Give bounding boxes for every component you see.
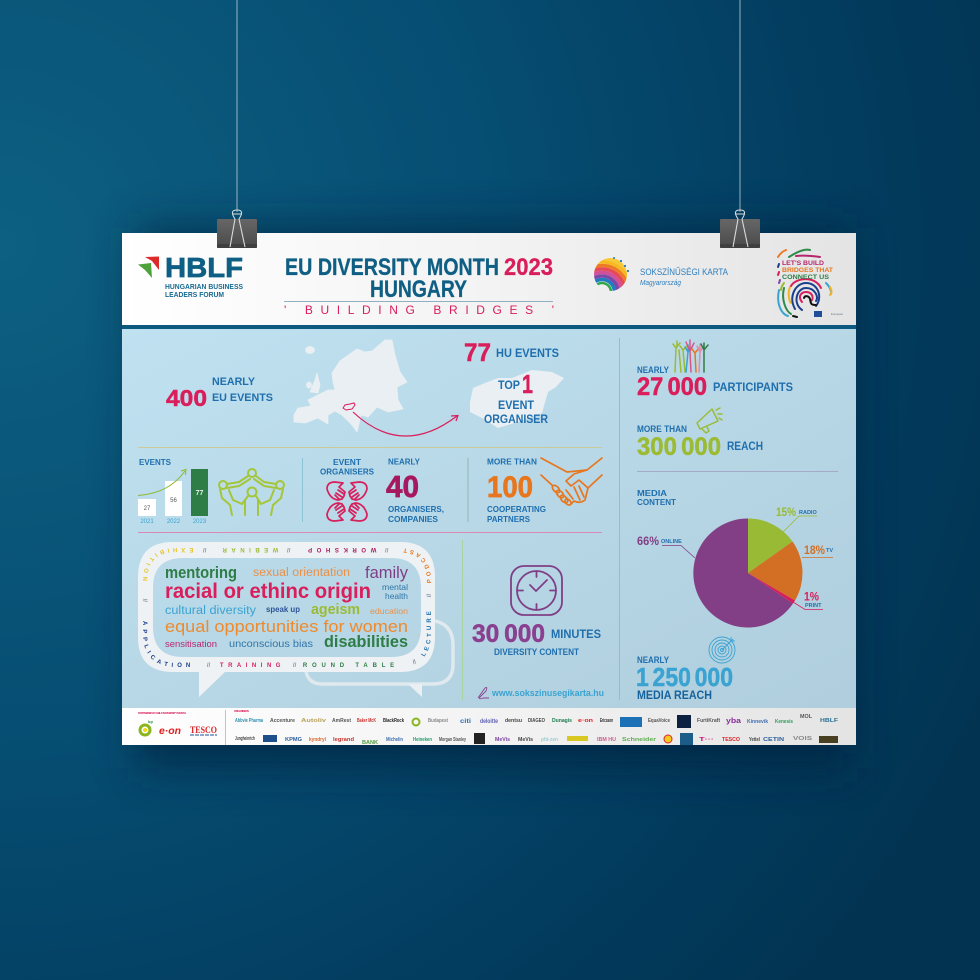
organiser logos: Ericsson <box>600 718 613 724</box>
organiser logos: Autoliv <box>301 718 326 724</box>
word cloud: sexual orientation <box>253 567 350 579</box>
EU flag <box>814 311 822 317</box>
stat: top 1 event organiser <box>484 369 549 426</box>
second bubble outline <box>306 621 453 697</box>
icon: clock <box>511 566 562 615</box>
icon: handshake <box>541 458 602 506</box>
word cloud: unconscious bias <box>229 638 313 650</box>
footer sponsors <box>138 709 838 746</box>
chart label: EVENTS <box>139 457 171 467</box>
organiser logos: CETIN <box>763 737 785 743</box>
icon: four hands <box>327 482 367 521</box>
organiser logos: FurtiKraft <box>697 718 720 724</box>
footer band <box>122 708 856 745</box>
icon: raised hands <box>673 340 708 372</box>
ring label text: // <box>143 598 148 602</box>
organiser logos: HBLF <box>820 718 838 724</box>
media content heading: MEDIA <box>637 488 667 498</box>
subtitle: ' BUILDING BRIDGES ' <box>284 303 554 317</box>
organiser logos: e·on <box>578 718 593 724</box>
ring label text: LECTURE <box>421 612 431 656</box>
ring label text: APPLICATION <box>143 621 190 667</box>
word cloud speech bubble <box>138 542 455 697</box>
organiser logos: Baker McK <box>357 718 376 724</box>
organiser logos: legrand <box>333 737 354 743</box>
text: event organisers heading: ORGANISERS <box>320 466 374 476</box>
campaign slogan: LET'S BUILD <box>782 260 824 267</box>
organiser logos: Budapest <box>428 718 448 724</box>
stat: 77 HU events: 77 <box>464 339 491 367</box>
stat: 27 000 participants: PARTICIPANTS <box>713 382 793 394</box>
icon: megaphone <box>697 408 722 433</box>
stat: 400 EU events <box>166 376 273 411</box>
hanging string right <box>739 0 741 212</box>
organiser logos: phi-zen <box>541 737 558 743</box>
binder clip left <box>217 210 257 248</box>
sponsor: bp: bp <box>148 719 153 724</box>
logo subtitle: LEADERS FORUM <box>165 290 224 299</box>
stat: 77 HU events: HU EVENTS <box>496 348 559 360</box>
label: radio: 15% <box>776 505 796 519</box>
organiser logos: MOL <box>800 714 812 720</box>
word cloud <box>165 563 408 651</box>
stat: more than 100 partners: 100 <box>487 471 533 504</box>
bar 2023: 77 <box>196 490 203 497</box>
slice: TV 18% <box>748 542 802 600</box>
header rule <box>122 325 856 329</box>
stat: 1 250 000 media reach: NEARLY <box>637 655 669 665</box>
organiser logos: Kinnevik <box>747 719 768 725</box>
stat: 300 000 reach: 300 000 <box>637 433 721 461</box>
title rule <box>284 300 553 302</box>
organiser logos: BANK <box>362 740 378 746</box>
word cloud: education <box>370 606 408 616</box>
organiser logos: T··· <box>699 737 715 743</box>
stat: more than 100 partners: PARTNERS <box>487 514 530 524</box>
organiser logos: Accenture <box>270 718 295 724</box>
stat: 1 250 000 media reach <box>636 655 733 702</box>
logo: Sokszínűségi Karta <box>594 257 728 291</box>
rainbow globe <box>594 257 630 291</box>
organiser logos: Morgan Stanley <box>439 737 466 743</box>
sponsor: bp <box>140 719 153 735</box>
ring label text: // <box>385 548 388 552</box>
organiser logos: Kenesis <box>775 719 793 725</box>
bar 2021: 27 <box>144 506 151 512</box>
organiser logos: Jungheinrich <box>235 736 255 742</box>
label: online: ONLINE <box>661 539 682 545</box>
organiser logos: Schneider <box>622 737 656 743</box>
bar 2022: 56 <box>170 498 177 504</box>
organisation name: SOKSZÍNŰSÉGI KARTA <box>640 267 728 277</box>
label: print <box>793 590 823 610</box>
slice: print 1% <box>748 573 795 604</box>
poster shadow <box>135 228 850 768</box>
logo: HBLF <box>138 252 243 299</box>
stat: 27 000 participants: NEARLY <box>637 365 669 375</box>
organiser logos: IBM HU <box>597 737 616 743</box>
organiser logos: TESCO <box>722 737 740 743</box>
sponsor: Tesco: TESCO <box>190 725 217 735</box>
title <box>285 254 553 303</box>
organisation name: Magyarország <box>640 280 681 287</box>
organiser logos: Heineken <box>413 737 432 743</box>
stat: 1 250 000 media reach: MEDIA REACH <box>637 690 712 702</box>
icon: target <box>709 637 735 663</box>
sponsor: e-on: e·on <box>159 726 181 737</box>
label: TV: 18% <box>804 543 825 557</box>
stat: more than 100 partners: MORE THAN <box>487 456 537 466</box>
word cloud: family <box>365 563 408 582</box>
stat: more than 100 partners: COOPERATING <box>487 504 546 514</box>
word cloud: speak up <box>266 604 300 614</box>
organiser logos: AmRest <box>332 718 351 724</box>
stat: top 1 event organiser: EVENT <box>498 400 534 412</box>
stat: 400 EU events: 400 <box>166 385 207 411</box>
map: Hungary <box>470 370 564 428</box>
word cloud: disabilities <box>324 632 408 651</box>
organiser logos: VOIS <box>793 736 813 742</box>
label: print: PRINT <box>805 603 822 609</box>
stat: 77 HU events <box>464 339 559 367</box>
stat: 27 000 participants <box>637 365 793 401</box>
campaign slogan <box>782 260 834 281</box>
pie chart: media content <box>637 505 833 627</box>
organiser logos: KPMG <box>285 737 302 743</box>
header band <box>122 233 856 325</box>
stat: 1 250 000 media reach: 1 250 000 <box>636 662 733 692</box>
logo subtitle: HUNGARIAN BUSINESS <box>165 282 243 291</box>
organiser logos: Yettel <box>749 737 761 743</box>
ring label text: // <box>207 662 210 667</box>
stat: 300 000 reach: REACH <box>727 441 763 453</box>
arrow to Hungary <box>353 412 458 436</box>
ring label text: WORKSHOP <box>308 548 376 552</box>
ring label text: // <box>287 548 290 552</box>
bar chart: events <box>138 457 208 525</box>
stat: nearly 40 organisers: 40 <box>386 469 419 504</box>
organiser logos <box>235 714 838 746</box>
campaign slogan: BRIDGES THAT <box>782 267 834 274</box>
label: print: 1% <box>804 590 819 604</box>
logo mark <box>138 256 159 278</box>
year labels: 2023 <box>193 519 207 525</box>
media content heading: CONTENT <box>637 497 677 507</box>
slice: radio 15% <box>748 518 792 573</box>
label: online: 66% <box>637 534 659 548</box>
stat: 30 000 minutes: 30 000 <box>472 620 545 648</box>
European Commission caption: European <box>831 312 844 316</box>
stat: 400 EU events: EU EVENTS <box>212 392 273 404</box>
stat: 400 EU events: NEARLY <box>212 376 256 388</box>
sponsors caption: PARTNERED BY HBLF IN DIVERSITY MONTH <box>138 711 186 715</box>
icon: pen signature <box>478 687 489 699</box>
footer divider <box>224 710 226 745</box>
stat: top 1 event organiser: ORGANISER <box>484 414 549 426</box>
body panel <box>122 329 856 708</box>
stat: 300 000 reach: MORE THAN <box>637 424 687 434</box>
map: Europe <box>294 340 407 432</box>
website link: www.sokszinusegikarta.hu <box>491 688 604 698</box>
organiser logos: DIAGEO <box>528 718 545 724</box>
label: TV: TV <box>826 548 833 554</box>
organiser logos: Abbvie Pharma <box>235 718 263 724</box>
label: radio <box>776 505 817 532</box>
label: radio: RADIO <box>799 510 817 516</box>
Hungary marker <box>343 403 355 410</box>
word cloud: mental <box>382 582 408 592</box>
logo wordmark: HBLF <box>165 252 243 283</box>
year labels: 2021 <box>140 519 154 525</box>
word cloud: racial or ethinc origin <box>165 580 371 603</box>
binder clip right <box>720 210 760 248</box>
organiser logos: deloitte <box>480 719 499 725</box>
ring label text: // <box>426 594 431 598</box>
ring label text: WEBINAR <box>222 548 278 552</box>
slice: online 66% <box>693 518 793 627</box>
organiser logos: EquaVoice <box>648 718 670 724</box>
organiser logos: MeVis <box>495 737 510 743</box>
organisers caption: ORGANISERS <box>234 709 249 713</box>
campaign logo: fingerprint <box>778 250 844 317</box>
organiser logos: citi <box>460 719 471 725</box>
section rules <box>138 338 838 700</box>
ring label text: PODCAST <box>403 548 432 583</box>
organiser logos: Dunagis <box>552 718 572 724</box>
media content heading <box>637 488 677 507</box>
stat: 30 000 minutes: DIVERSITY CONTENT <box>494 647 580 657</box>
fingerprint rings <box>778 250 832 317</box>
ring label text: TRAINING <box>220 662 280 667</box>
logo subtitle <box>165 282 243 299</box>
ring label text <box>143 548 432 667</box>
word cloud: ageism <box>311 601 360 618</box>
word cloud: equal opportunities for women <box>165 617 408 636</box>
word cloud: sensitisation <box>165 639 217 649</box>
stat: top 1 event organiser: TOP <box>498 380 520 392</box>
stat: 27 000 participants: 27 000 <box>637 373 707 401</box>
stat: more than 100 partners <box>487 456 546 524</box>
stat: top 1 event organiser: 1 <box>522 369 533 399</box>
stat: 300 000 reach <box>637 424 763 461</box>
ring label text: EXHIBITION <box>143 548 193 581</box>
organiser logos: BlackRock <box>383 718 404 724</box>
stat: nearly 40 organisers: ORGANISERS, <box>388 504 444 514</box>
hanging string left <box>236 0 238 212</box>
growth arrow <box>138 470 186 496</box>
stat: 30 000 minutes <box>472 620 601 657</box>
ring label text: ROUND TABLE <box>303 662 394 667</box>
icon: people in a circle <box>219 469 284 515</box>
word cloud: cultural diversity <box>165 605 256 617</box>
title: 2023 <box>504 254 553 281</box>
year labels: 2022 <box>167 519 181 525</box>
label: online <box>637 534 695 558</box>
word cloud: health <box>385 591 408 601</box>
title: HUNGARY <box>370 276 467 303</box>
campaign slogan: CONNECT US <box>782 274 829 281</box>
main bubble ring <box>138 542 435 672</box>
poster <box>122 233 856 746</box>
ring label text: // <box>412 659 416 664</box>
ring label text: // <box>293 662 296 667</box>
organisation name <box>640 267 728 287</box>
text: event organisers heading <box>320 457 374 476</box>
stat: nearly 40 organisers: COMPANIES <box>388 514 438 524</box>
organiser logos: Michelin <box>386 737 403 743</box>
organiser logos: yba <box>726 718 741 725</box>
stat: 30 000 minutes: MINUTES <box>551 627 601 641</box>
stat: nearly 40 organisers <box>386 456 444 524</box>
organiser logos: kyndryl <box>309 737 327 743</box>
organiser logos: dentsu <box>505 718 522 724</box>
year labels <box>140 519 207 525</box>
text: event organisers heading: EVENT <box>333 457 362 467</box>
word cloud: mentoring <box>165 564 237 582</box>
bubble tail <box>199 671 226 697</box>
stat: nearly 40 organisers: NEARLY <box>388 456 420 466</box>
title: EU DIVERSITY MONTH <box>285 254 499 281</box>
organiser logos: MeVis <box>518 737 533 743</box>
ring label text: // <box>203 548 206 552</box>
